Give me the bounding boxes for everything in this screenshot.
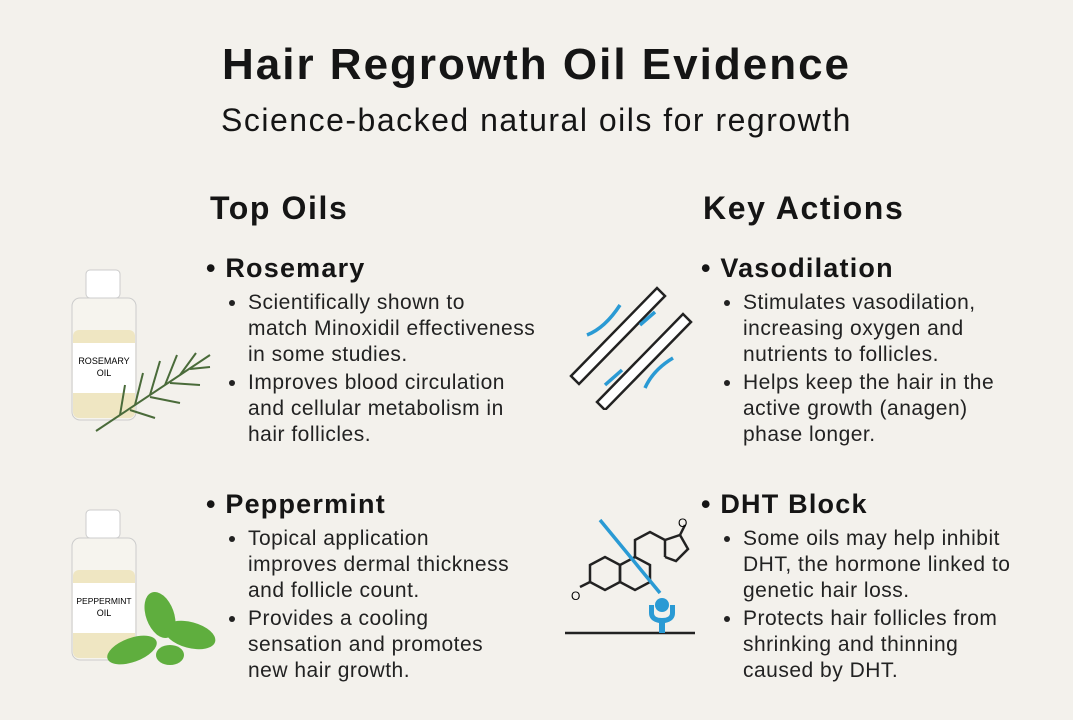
- text: DHT details: caused by DHT.: [743, 659, 898, 682]
- text: peppermint details: new hair growth.: [248, 659, 410, 682]
- text: rosemary details: and cellular metabolism in: [248, 397, 504, 420]
- icon: DHT block: O: [678, 516, 687, 530]
- panel: vasodilation: [701, 253, 994, 446]
- text: peppermint details: and follicle count.: [248, 579, 420, 602]
- text: peppermint details: [229, 527, 509, 682]
- icon: rosemary oil bottle: [72, 270, 210, 432]
- text: DHT details: [724, 527, 1010, 682]
- icon: peppermint oil bottle: PEPPERMINT: [76, 596, 132, 606]
- text: peppermint details: improves dermal thickness: [248, 553, 509, 576]
- text: DHT details: Some oils may help inhibit: [743, 527, 1000, 550]
- title: Hair Regrowth Oil Evidence: [222, 40, 851, 89]
- text: rosemary details: Improves blood circulation: [248, 371, 505, 394]
- text: DHT details: shrinking and thinning: [743, 633, 958, 656]
- text: DHT details: genetic hair loss.: [743, 579, 910, 602]
- icon: peppermint oil bottle: [72, 510, 216, 665]
- icon: DHT block: O: [571, 589, 580, 603]
- heading: Key Actions: Key Actions: [703, 190, 904, 226]
- text: peppermint details: Topical application: [248, 527, 429, 550]
- text: rosemary details: in some studies.: [248, 343, 408, 366]
- icon: vasodilation: [569, 286, 693, 410]
- text: vasodilation details: active growth (anagen): [743, 397, 968, 420]
- icon: peppermint oil bottle: OIL: [97, 608, 111, 618]
- icon: rosemary oil bottle: ROSEMARY: [78, 356, 130, 366]
- subtitle: Science-backed natural oils for regrowth: [221, 102, 852, 138]
- panel: rosemary: [206, 253, 535, 446]
- text: vasodilation details: Helps keep the hair in the: [743, 371, 994, 394]
- heading: peppermint: • Peppermint: [206, 489, 386, 519]
- heading: DHT block: • DHT Block: [701, 489, 868, 519]
- text: vasodilation details: [724, 291, 994, 446]
- text: rosemary details: match Minoxidil effectiveness: [248, 317, 535, 340]
- heading: vasodilation: • Vasodilation: [701, 253, 894, 283]
- panel: DHT block: [701, 489, 1010, 682]
- text: rosemary details: [229, 291, 535, 446]
- text: vasodilation details: Stimulates vasodilation,: [743, 291, 976, 314]
- text: vasodilation details: increasing oxygen and: [743, 317, 964, 340]
- icon: DHT block: [565, 516, 695, 634]
- icon: rosemary oil bottle: OIL: [97, 368, 111, 378]
- text: peppermint details: Provides a cooling: [248, 607, 429, 630]
- text: peppermint details: sensation and promotes: [248, 633, 483, 656]
- heading: rosemary: • Rosemary: [206, 253, 366, 283]
- text: vasodilation details: nutrients to follicles.: [743, 343, 939, 366]
- text: rosemary details: Scientifically shown to: [248, 291, 465, 314]
- text: DHT details: DHT, the hormone linked to: [743, 553, 1010, 576]
- text: vasodilation details: phase longer.: [743, 423, 876, 446]
- heading: Top Oils: Top Oils: [210, 190, 348, 226]
- text: rosemary details: hair follicles.: [248, 423, 371, 446]
- text: DHT details: Protects hair follicles from: [743, 607, 997, 630]
- panel: peppermint: [206, 489, 509, 682]
